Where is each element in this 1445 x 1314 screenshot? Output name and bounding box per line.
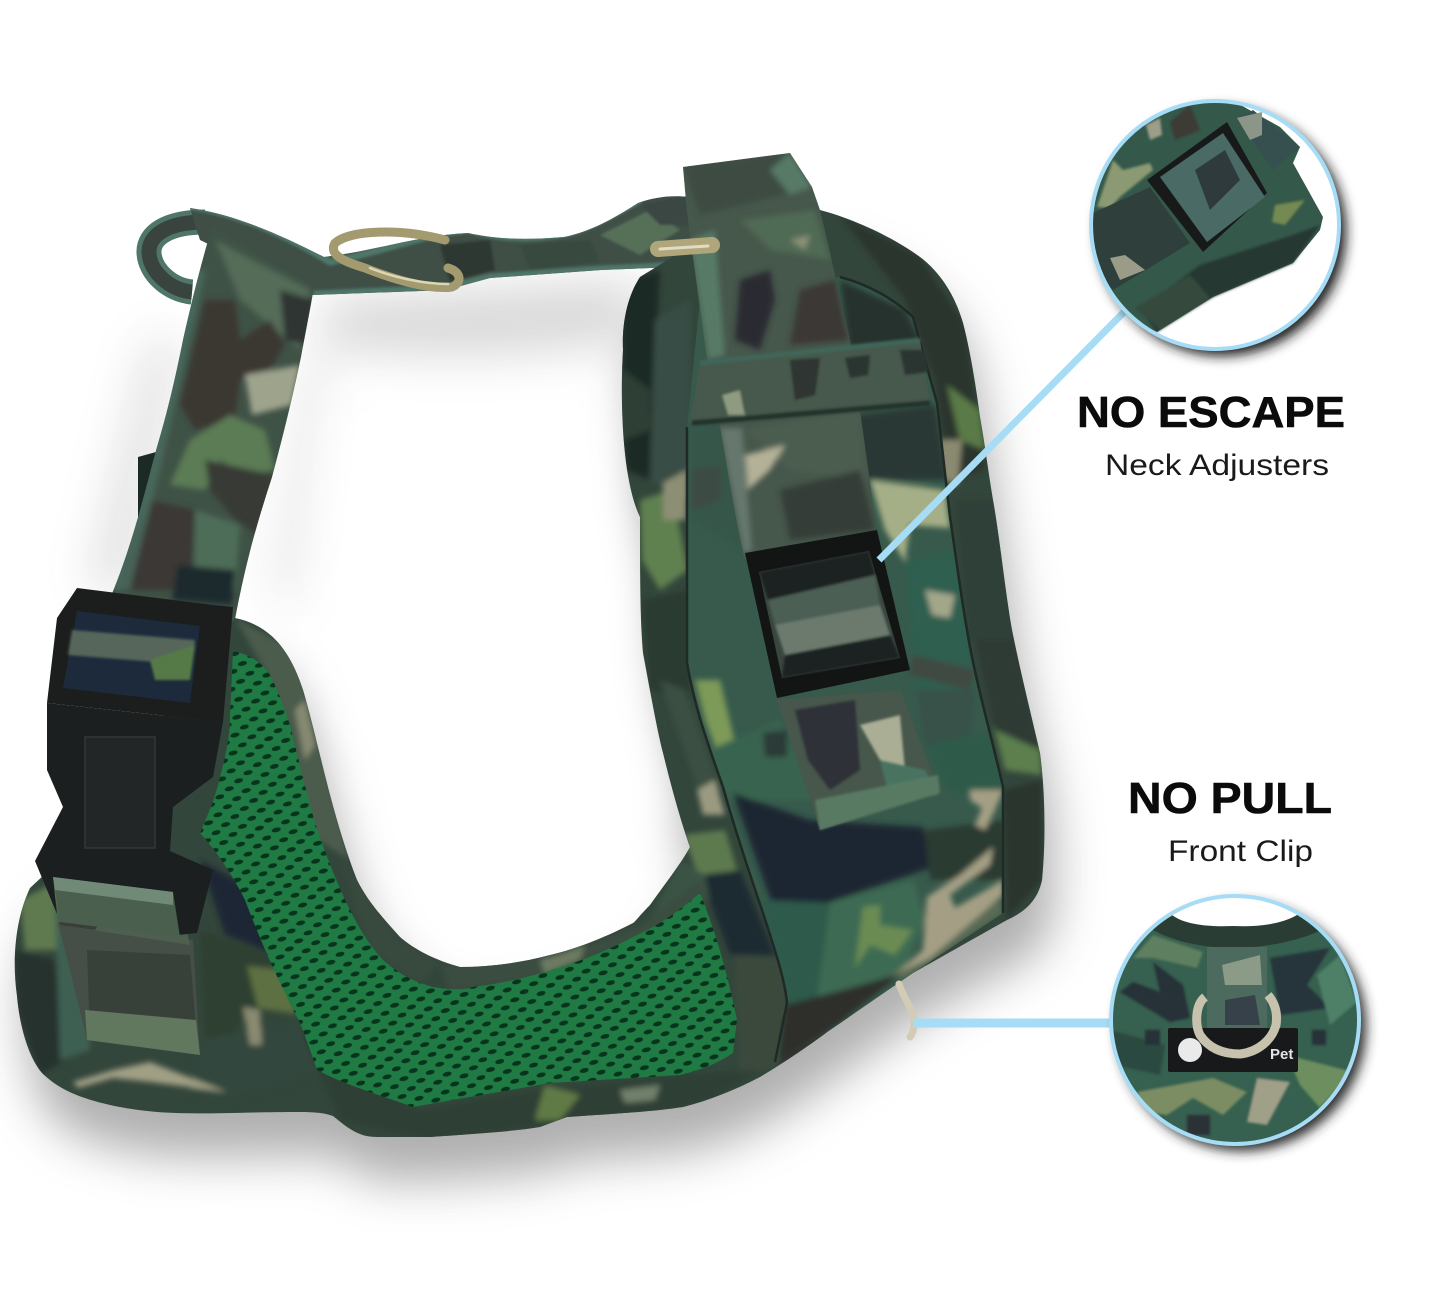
green mesh lining <box>190 640 750 1120</box>
O ring <box>333 232 459 288</box>
black backing behind left strap <box>130 452 156 590</box>
cover shadow inside harness opening <box>334 400 665 886</box>
front D ring tip <box>899 984 914 1037</box>
detail circle: neck adjuster <box>1080 90 1346 356</box>
inner right panel <box>680 270 1020 1070</box>
label: NO ESCAPE: NO ESCAPE <box>1077 388 1345 437</box>
side release buckle <box>35 588 233 937</box>
vertical adjuster strap <box>683 153 876 560</box>
seam lines <box>687 277 1003 1062</box>
camouflage patches on outer band <box>15 215 1042 1140</box>
main padded vest body <box>0 190 1060 1150</box>
connector line: neck adjuster <box>879 312 1124 560</box>
upper webbing <box>1251 110 1300 170</box>
label: NO PULL: NO PULL <box>1128 774 1332 823</box>
connector line: front clip <box>913 1018 1112 1028</box>
vest section <box>1093 103 1323 332</box>
slider <box>1147 122 1267 252</box>
D ring <box>1197 995 1277 1054</box>
lower left webbing tab <box>58 900 200 1055</box>
harness illustration <box>0 150 1060 1150</box>
left neck strap <box>112 240 313 623</box>
drop shadow under harness <box>25 254 1054 1181</box>
label: Front Clip: Front Clip <box>1168 835 1313 868</box>
slide buckle with webbing <box>745 530 910 698</box>
webbing band <box>1093 187 1190 290</box>
webbing tab <box>1207 947 1267 1028</box>
detail circle: front clip: Pet <box>1270 1046 1293 1063</box>
detail circle: front clip <box>1100 880 1370 1151</box>
label: Neck Adjusters: Neck Adjusters <box>1105 449 1329 482</box>
strap tail with stitching <box>777 690 940 830</box>
cross keeper band <box>690 340 930 423</box>
top strap <box>190 196 690 295</box>
brand patch <box>1168 1028 1298 1072</box>
collar opening <box>1153 915 1319 947</box>
loop strap end <box>149 222 205 292</box>
left lobe patches <box>20 880 65 950</box>
D ring <box>658 245 712 249</box>
